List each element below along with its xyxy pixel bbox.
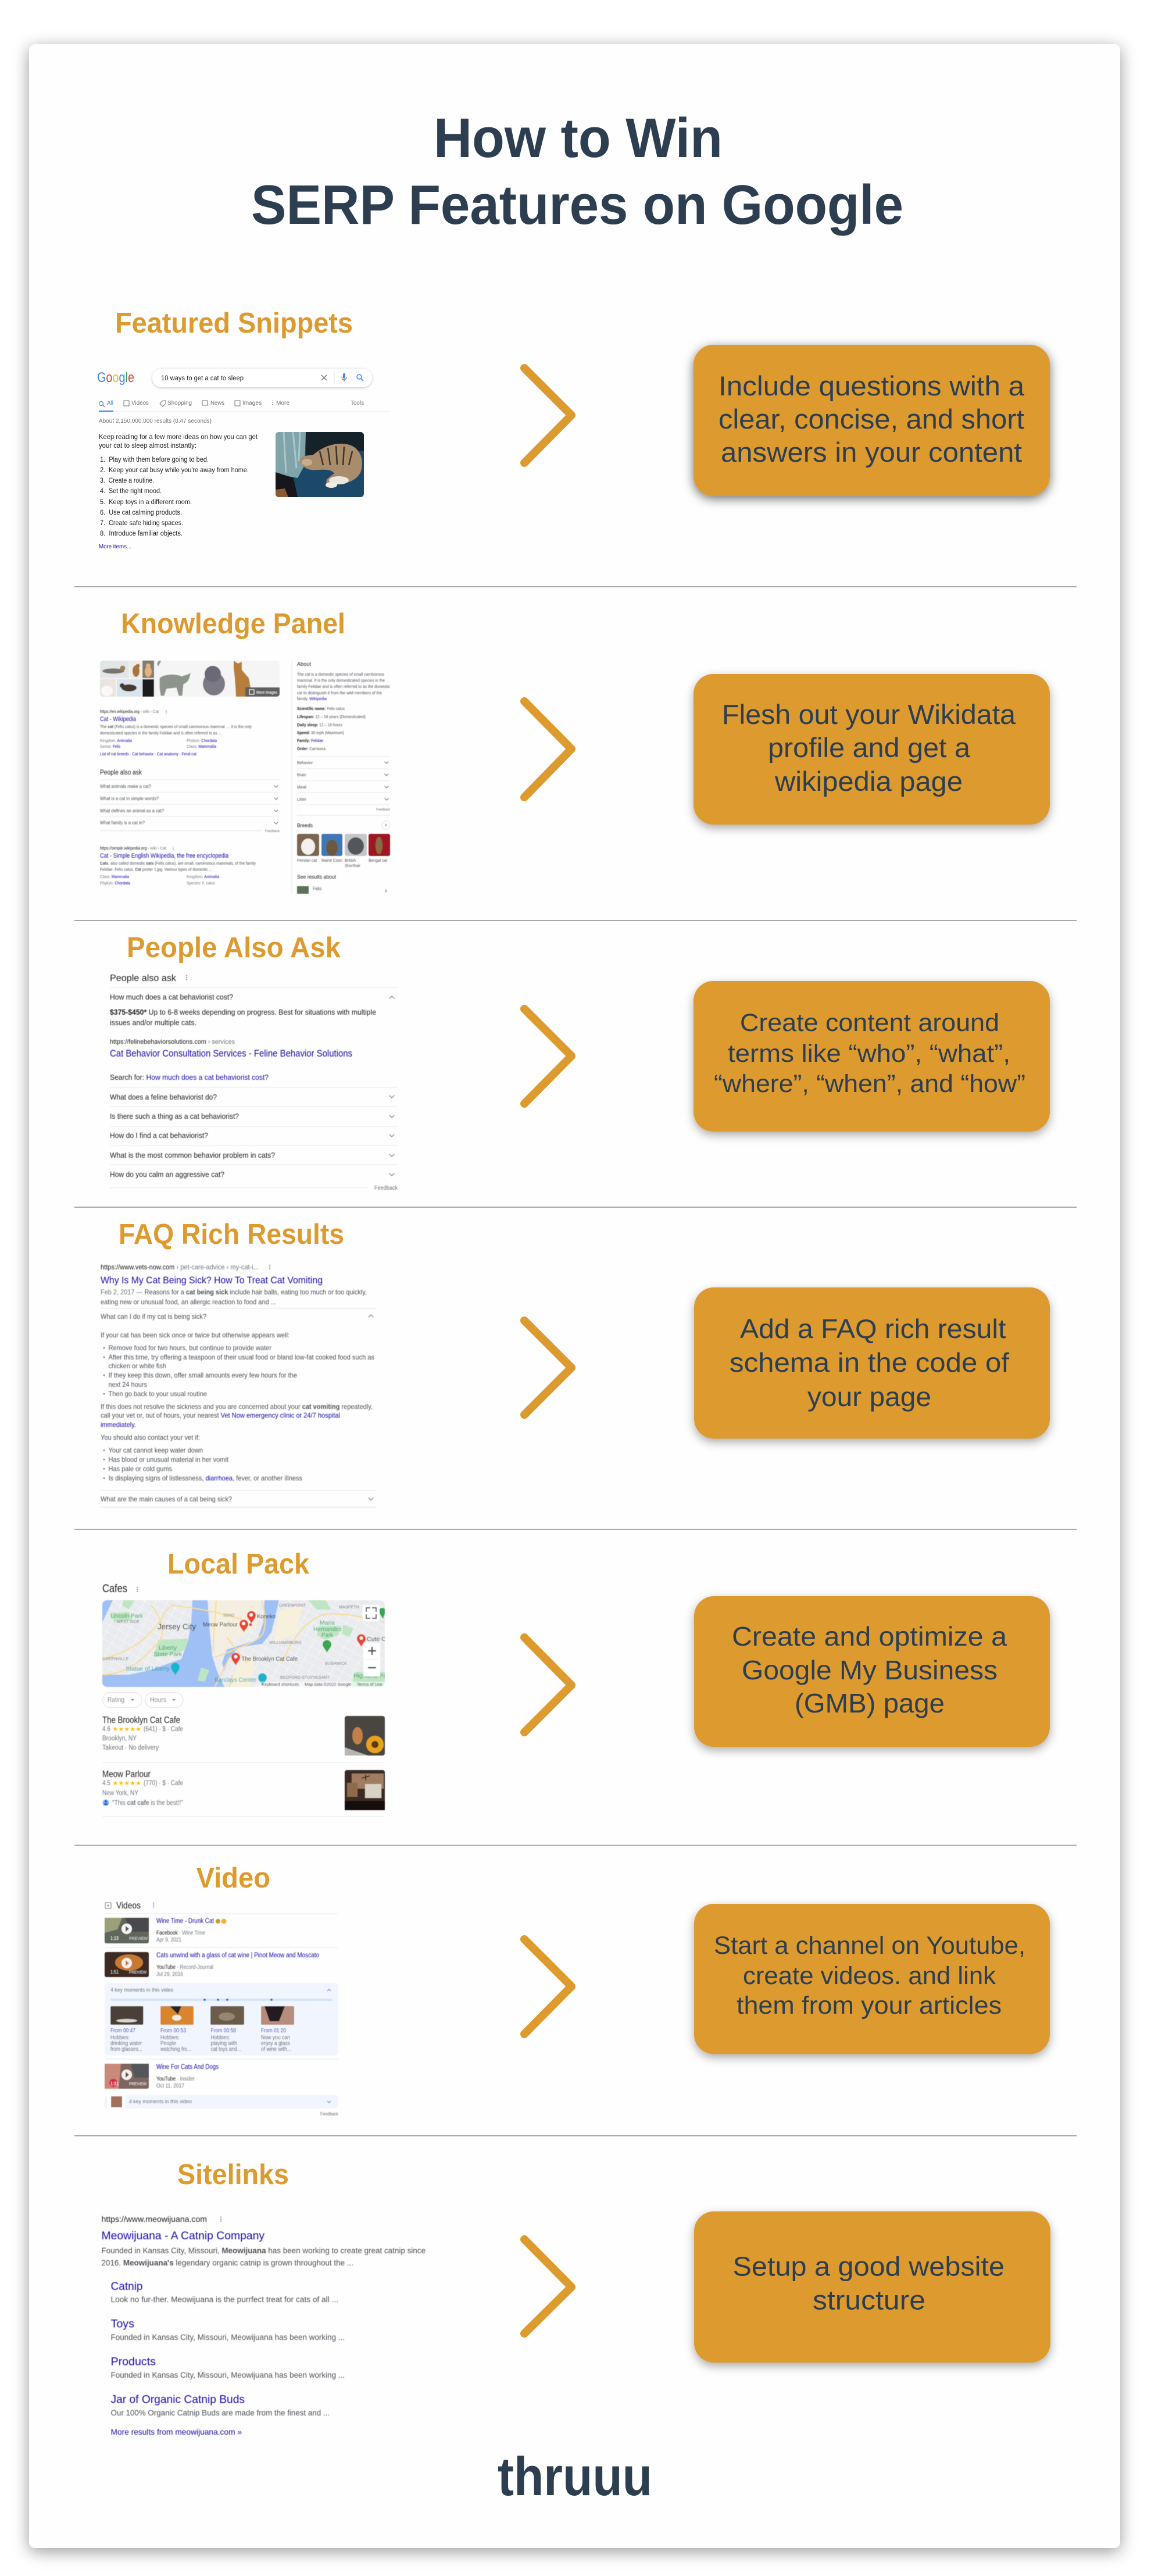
collapsed key moments: Feedback (320, 2111, 339, 2117)
google logo: Google (97, 370, 134, 386)
callout: video advice (694, 1904, 1050, 2054)
collapsed key moments: 4 key moments in this video (129, 2099, 192, 2105)
video result 3: Oct 11, 2017 (156, 2083, 184, 2089)
screenshot: people also ask box (110, 973, 398, 1191)
callout: sitelinks advice (694, 2211, 1050, 2363)
callout: people also ask advice (694, 981, 1050, 1132)
about panel: Litter (297, 797, 306, 802)
callout: faq advice: schema in the code of (730, 1347, 1009, 1378)
expanded faq answer: You should also contact your vet if: (101, 1433, 200, 1442)
key moments panel: From 01:20 (261, 2028, 286, 2034)
snippet list: 5. Keep toys in a different room. (100, 499, 192, 506)
listing: the brooklyn cat cafe: Brooklyn, NY (102, 1735, 137, 1742)
arrow: video (524, 1939, 571, 2034)
box heading: People also ask (110, 973, 177, 983)
map: BEDFORD-STUYVESANT (280, 1675, 330, 1680)
sitelink: jar of organic catnip buds: Jar of Organic Catnip Buds (110, 2393, 245, 2406)
screenshot: local pack results (102, 1583, 394, 1817)
expanded question: https://felinebehaviorsolutions.com › services (110, 1039, 235, 1046)
people also ask list: People also ask (100, 769, 142, 776)
people also ask list: What family is a cat in? (100, 820, 145, 826)
sitelink: toys: Toys (110, 2318, 134, 2331)
video result 1 (105, 1918, 338, 1947)
video result 1: PREVIEW (129, 1936, 148, 1941)
key moments panel: From 00:47 (110, 2028, 135, 2034)
key moments panel: cat toys and... (210, 2046, 241, 2053)
callout: featured snippets advice: Include questions with a (719, 370, 1025, 401)
snippet list: 3. Create a routine. (100, 477, 154, 484)
screenshot: video results (105, 1901, 339, 2117)
about panel (297, 661, 391, 815)
manhattan and downtown blocks (210, 1600, 262, 1657)
about panel: mammal. It is the only domesticated species in the (297, 678, 385, 683)
people also ask list: Feedback (265, 829, 280, 833)
title: SERP Features on Google (251, 174, 903, 236)
breeds row: Bengal cat (369, 858, 388, 863)
callout: faq advice (694, 1287, 1050, 1439)
people also ask list: What animals make a cat? (100, 784, 152, 789)
collapsed questions (110, 1087, 398, 1191)
section: faq rich results (101, 1219, 1050, 1507)
breeds row: See results about (297, 874, 336, 880)
listing: meow parlour: New York, NY (102, 1790, 138, 1797)
map footer (259, 1682, 385, 1687)
callout: knowledge panel advice (694, 674, 1050, 825)
heading: knowledge panel: Knowledge Panel (121, 608, 345, 640)
about panel: cat to distinguish it from the wild members of the (297, 690, 382, 695)
screenshot: knowledge panel results (100, 661, 391, 894)
sitelink: toys: Founded in Kansas City, Missouri, Meowijuana has been working ... (110, 2333, 345, 2342)
simple wikipedia result: Cat - Simple English Wikipedia, the free encyclopedia (100, 852, 229, 859)
result header: Why Is My Cat Being Sick? How To Treat Cat Vomiting (101, 1275, 323, 1286)
sitelink: products: Products (110, 2356, 156, 2368)
about panel: family Felidae and is often referred to as the domestic (297, 684, 390, 689)
map: Liberty (159, 1644, 177, 1651)
map: Meow Parlour (203, 1621, 238, 1628)
map: Koneko (257, 1613, 276, 1620)
key moments panel: enjoy a glass (261, 2040, 290, 2047)
expanded faq answer: immediately. (101, 1421, 136, 1429)
about panel: Feedback (376, 808, 391, 812)
expanded faq answer: Has blood or unusual material in her vomit (108, 1455, 229, 1464)
breeds row: Persian cat (297, 858, 317, 863)
main result: Founded in Kansas City, Missouri, Meowijuana has been working to create great catnip since (101, 2246, 426, 2255)
arrow: featured snippets (524, 368, 571, 463)
section: people also ask (110, 932, 1050, 1191)
snippet list: 6. Use cat calming products. (100, 509, 182, 516)
snippet list: Keep reading for a few more ideas on how you can get (99, 433, 258, 441)
heading: featured snippets: Featured Snippets (115, 308, 353, 339)
map: Highland Park (353, 1672, 392, 1679)
video result 2 (105, 1952, 319, 1978)
video result 3: Wine For Cats And Dogs (156, 2064, 219, 2071)
about panel: Behavior (297, 760, 313, 765)
key moments panel: People (160, 2040, 176, 2047)
callout: local pack advice: (GMB) page (795, 1688, 945, 1718)
sitelink: catnip: Catnip (110, 2281, 143, 2293)
map pins (247, 1611, 256, 1624)
video result 3 (105, 2064, 219, 2089)
collapsed faq question: What are the main causes of a cat being sick? (101, 1495, 232, 1503)
result count: About 2,150,000,000 results (0.47 seconds) (99, 418, 212, 424)
heading: sitelinks: Sitelinks (177, 2159, 289, 2190)
map: WEST SIDE (117, 1619, 140, 1624)
simple wikipedia result: Felidae. Felis catus. Cat poster 1.jpg. Various types of domestic ... (100, 866, 212, 872)
callout: faq advice: Add a FAQ rich result (740, 1314, 1006, 1344)
map: Statue of Liberty (126, 1665, 170, 1672)
expanded question: issues and/or multiple cats. (110, 1018, 196, 1027)
search tabs: Images (242, 399, 262, 406)
about panel: Daily sleep: 12 – 16 hours (297, 722, 342, 727)
collapsed questions: What is the most common behavior problem in cats? (110, 1151, 275, 1159)
videos heading: Videos (116, 1901, 141, 1911)
snippet list: your cat to sleep almost instantly: (99, 441, 196, 449)
search tabs: News (210, 399, 224, 406)
expanded faq answer: If this does not resolve the sickness and you are concerned about your cat vomiting repeatedly, (101, 1403, 373, 1411)
section: knowledge panel (100, 608, 1050, 894)
cafes heading: Cafes (102, 1583, 127, 1595)
key moments panel: from glasses... (110, 2046, 142, 2053)
about panel: About (297, 661, 311, 668)
video result 2: Cats unwind with a glass of cat wine | Pinot Meow and Moscato (156, 1952, 319, 1959)
callout: sitelinks advice: Setup a good website (732, 2252, 1005, 2282)
map: MASPETH (339, 1604, 359, 1610)
breeds row: Shorthair (345, 863, 360, 868)
sitelink: jar of organic catnip buds (110, 2393, 330, 2417)
expanded faq answer: Your cat cannot keep water down (108, 1446, 203, 1454)
main result: https://www.meowijuana.com (101, 2215, 207, 2224)
map (102, 1600, 394, 1687)
listing: meow parlour: 4.5 (102, 1780, 110, 1787)
simple wikipedia result: Species: F. catus (187, 880, 215, 886)
key moments panel: Hobbies: (110, 2035, 130, 2041)
simple wikipedia result: Phylum: Chordata (100, 880, 131, 886)
filter chips: Hours (150, 1697, 166, 1704)
map: The Brooklyn Cat Cafe (242, 1656, 298, 1662)
search tabs: Shopping (167, 399, 192, 406)
map: SOHO (223, 1612, 234, 1618)
wikipedia result (100, 709, 252, 757)
map: WILLIAMSBURG (269, 1640, 302, 1645)
about panel: Meat (297, 784, 307, 790)
main result: 2016. Meowijuana's legendary organic catnip is grown throughout the ... (101, 2259, 353, 2267)
search tabs: All (107, 399, 113, 406)
heading: people also ask: People Also Ask (127, 932, 341, 964)
result header: eating new or unusual food, an allergic reaction to food and ... (101, 1298, 276, 1306)
callout: video advice: them from your articles (737, 1992, 1002, 2020)
wikipedia result: Cat - Wikipedia (100, 716, 137, 723)
search tabs (99, 399, 389, 412)
key moments panel: watching fro... (160, 2046, 191, 2053)
search box: 10 ways to get a cat to sleep (161, 375, 244, 382)
callout: people also ask advice: “where”, “when”, and “how” (714, 1070, 1025, 1098)
title: How to Win (434, 107, 723, 169)
section: featured snippets (74, 308, 1077, 2507)
map: Keyboard shortcuts (262, 1682, 299, 1687)
section: sitelinks (101, 2159, 1050, 2436)
expanded faq answer: next 24 hours (108, 1380, 147, 1389)
map: Map data ©2022 Google (305, 1682, 351, 1687)
callout: local pack advice: Create and optimize a (732, 1621, 1007, 1651)
search tabs: Tools (351, 399, 364, 406)
callout: video advice: Start a channel on Youtube, (714, 1932, 1025, 1960)
heading: faq rich results: FAQ Rich Results (119, 1219, 344, 1250)
expanded question: $375-$450* Up to 6-8 weeks depending on progress. Best for situations with multiple (110, 1008, 376, 1016)
logo: thruuu: thruuu (498, 2446, 652, 2507)
snippet list: 4. Set the right mood. (100, 488, 162, 495)
listing: the brooklyn cat cafe: 4.6 (102, 1726, 110, 1733)
wikipedia result: Genus: Felis (100, 744, 120, 749)
arrow: sitelinks (524, 2239, 571, 2334)
snippet list: More items... (99, 544, 131, 550)
more results link: More results from meowijuana.com » (110, 2428, 242, 2436)
map labels: Lincoln Park (110, 1612, 144, 1619)
expanded faq answer: If they keep this down, offer small amounts every few hours for the (108, 1371, 297, 1379)
video result 3: 1:31 (110, 2081, 119, 2086)
screenshot: featured snippet result (97, 369, 389, 550)
search box (152, 369, 372, 387)
arrow: people also ask (524, 1009, 571, 1104)
about panel: Scientific name: Felis catus (297, 706, 345, 711)
simple wikipedia result: Kingdom: Animalia (187, 874, 220, 879)
section: video (105, 1863, 1050, 2117)
about panel: The cat is a domestic species of small carnivorous (297, 672, 384, 677)
about panel: Family: Felidae (297, 738, 323, 743)
video result 3: YouTube · Insider (156, 2076, 195, 2082)
sitelink: products: Founded in Kansas City, Missouri, Meowijuana has been working ... (110, 2371, 345, 2379)
expanded faq answer: If your cat has been sick once or twice but otherwise appears well: (101, 1331, 289, 1339)
people also ask list: What is a cat in simple words? (100, 796, 159, 801)
wikipedia result: Kingdom: Animalia (100, 738, 133, 743)
key moments panel: Hobbies: (160, 2035, 180, 2041)
map: Barclays Center (215, 1676, 256, 1683)
expanded question: Cat Behavior Consultation Services - Feline Behavior Solutions (110, 1048, 352, 1059)
main result: Meowijuana - A Catnip Company (101, 2230, 265, 2242)
map: BUSHWICK (325, 1661, 347, 1666)
expanded question: How much does a cat behaviorist cost? (110, 993, 233, 1001)
about panel: Lifespan: 12 – 18 years (Domesticated) (297, 714, 366, 719)
video result 1: 1:13 (110, 1936, 119, 1941)
map: GREENPOINT (279, 1603, 306, 1608)
key moments panel: drinking water (110, 2040, 142, 2047)
sitelink: catnip: Look no fur-ther. Meowijuana is the purrfect treat for cats of all ... (110, 2295, 338, 2304)
expanded question (110, 993, 394, 1082)
arrow: local pack (524, 1637, 571, 1732)
screenshot: sitelinks result (101, 2215, 426, 2436)
key moments panel: of wine with... (261, 2046, 291, 2053)
expanded question: Search for: How much does a cat behaviorist cost? (110, 1073, 269, 1082)
map controls (363, 1605, 380, 1621)
heading: video: Video (196, 1863, 270, 1894)
callout: knowledge panel advice: wikipedia page (774, 766, 963, 797)
listing: meow parlour: (770) · $ · Cafe (144, 1780, 183, 1787)
listing: the brooklyn cat cafe: ★★★★★ (113, 1726, 141, 1733)
about panel: Speed: 30 mph (Maximum) (297, 730, 344, 735)
key moments panel (105, 1983, 338, 2059)
snippet list: 1. Play with them before going to bed. (100, 456, 209, 463)
simple wikipedia result: Cats, also called domestic cats (Felis catus), are small, carnivorous mammals, of the family (100, 861, 256, 866)
wikipedia result: Class: Mammalia (187, 744, 217, 749)
heading: local pack: Local Pack (167, 1549, 310, 1580)
breeds row: Breeds (297, 822, 313, 829)
listing: meow parlour: Meow Parlour (102, 1769, 151, 1779)
map: Maria (320, 1619, 335, 1626)
simple wikipedia result: https://simple.wikipedia.org › wiki › Cat (100, 845, 167, 851)
sitelink: products (110, 2356, 345, 2379)
sitelink: jar of organic catnip buds: Our 100% Organic Catnip Buds are made from the finest and ... (110, 2409, 330, 2417)
expanded faq answer: Is displaying signs of listlessness, diarrhoea, fever, or another illness (108, 1474, 302, 1482)
video result 2: PREVIEW (129, 1970, 147, 1975)
callout: featured snippets advice: answers in your content (721, 437, 1022, 468)
collapsed questions: What does a feline behaviorist do? (110, 1093, 217, 1101)
breeds row: Maine Coon (321, 858, 342, 863)
video result 2: 1:51 (110, 1970, 119, 1975)
expanded faq answer: What can I do if my cat is being sick? (101, 1312, 206, 1321)
callout: video advice: create videos. and link (743, 1962, 996, 1990)
map: Park (321, 1632, 334, 1639)
snippet list: 2. Keep your cat busy while you're away from home. (100, 467, 249, 474)
result header (101, 1263, 376, 1308)
breeds row: British (345, 858, 356, 863)
arrow: knowledge panel (524, 701, 571, 797)
main result (101, 2215, 426, 2267)
filter chips (102, 1692, 183, 1707)
people also ask list (100, 769, 280, 833)
map: Terms of Use (357, 1682, 383, 1687)
result header: https://www.vets-now.com › pet-care-advice › my-cat-i... (101, 1263, 259, 1271)
listing: the brooklyn cat cafe (102, 1715, 385, 1762)
callout: people also ask advice: Create content around (740, 1009, 999, 1037)
collapsed questions: Is there such a thing as a cat behaviorist? (110, 1112, 239, 1121)
collapsed questions: How do I find a cat behaviorist? (110, 1131, 208, 1140)
roads (102, 1600, 385, 1687)
callout: local pack advice: Google My Business (742, 1655, 998, 1685)
filter chips: Rating (108, 1697, 124, 1704)
expanded faq answer: call your vet or, out of hours, your nearest Vet Now emergency clinic or 24/7 hospital (101, 1411, 340, 1419)
callout: local pack advice (694, 1596, 1050, 1747)
photo: sleeping cat (276, 432, 364, 497)
video result 1: Wine Time - Drunk Cat (156, 1918, 215, 1925)
image strip (100, 661, 280, 697)
arrow: faq rich results (524, 1321, 571, 1415)
map: Cute Cafe (367, 1636, 394, 1643)
map: State Park (153, 1651, 183, 1658)
callout: sitelinks advice: structure (813, 2285, 925, 2315)
listing: meow parlour (102, 1769, 385, 1817)
expanded faq answer: chicken or white fish (108, 1362, 166, 1370)
collapsed faq question (101, 1490, 376, 1507)
section: local pack (102, 1549, 1050, 1817)
result header: Feb 2, 2017 — Reasons for a cat being sick include hair balls, eating too much or too quickly, (101, 1288, 367, 1296)
video result 1: Apr 9, 2021 (156, 1937, 181, 1943)
video result 3: PREVIEW (129, 2081, 147, 2086)
key moments panel: Now you can (261, 2035, 290, 2041)
listing: the brooklyn cat cafe: Takeout · No delivery (102, 1744, 159, 1751)
snippet list: 7. Create safe hiding spaces. (100, 520, 183, 527)
search tabs: Videos (131, 399, 149, 406)
simple wikipedia result: Class: Mammalia (100, 874, 130, 879)
about panel: family. Wikipedia (297, 696, 327, 701)
wikipedia result: List of cat breeds · Cat behavior · Cat anatomy · Feral cat (100, 751, 197, 757)
screenshot: faq rich result (101, 1263, 376, 1507)
expanded faq answer: Then go back to your usual routine (108, 1390, 207, 1398)
expanded faq answer: After this time, try offering a teaspoon of their usual food or bland low-fat cooked food such as (108, 1353, 374, 1361)
parks (110, 1600, 385, 1687)
collapsed questions: Feedback (374, 1185, 398, 1191)
callout: faq advice: your page (807, 1382, 931, 1412)
key moments panel: From 00:53 (160, 2028, 186, 2034)
map: GREENVILLE (102, 1656, 128, 1661)
wikipedia result: https://en.wikipedia.org › wiki › Cat (100, 709, 159, 714)
key moments panel: 4 key moments in this video (110, 1987, 173, 1993)
key moments panel: From 00:58 (210, 2028, 236, 2034)
wikipedia result: domesticated species in the family Felidae and is often referred to as ... (100, 730, 221, 736)
listing: meow parlour: "This cat cafe is the best!!" (112, 1800, 183, 1807)
breeds row: Felis (313, 886, 321, 891)
about panel: Brain (297, 772, 306, 777)
expanded faq answer: Remove food for two hours, but continue to provide water (108, 1344, 271, 1352)
wikipedia result: Phylum: Chordata (187, 738, 217, 743)
callout: featured snippets advice (694, 345, 1050, 496)
callout: knowledge panel advice: Flesh out your Wikidata (722, 699, 1016, 730)
collapsed key moments (105, 2095, 339, 2117)
callout: featured snippets advice: clear, concise, and short (719, 404, 1024, 434)
sitelink: toys (110, 2318, 345, 2342)
key moments panel: playing with (210, 2040, 237, 2047)
simple wikipedia result (100, 845, 256, 886)
callout: knowledge panel advice: profile and get a (768, 732, 971, 763)
callout: people also ask advice: terms like “who”, “what”, (728, 1040, 1010, 1068)
video result 2: Jul 29, 2016 (156, 1971, 183, 1978)
expanded faq answer: Has pale or cold gums (108, 1465, 172, 1473)
key moments panel: Hobbies: (210, 2035, 230, 2041)
snippet list: 8. Introduce familiar objects. (100, 530, 183, 537)
breeds row (297, 821, 390, 894)
videos heading (105, 1901, 338, 1914)
title (251, 107, 903, 236)
about panel: Order: Carnivora (297, 746, 326, 751)
image strip: More images (256, 690, 277, 695)
snippet list (99, 433, 258, 550)
search tabs: More (276, 399, 289, 406)
listing: meow parlour: ★★★★★ (113, 1780, 141, 1787)
video result 2: YouTube · Record-Journal (156, 1964, 213, 1971)
map: Jersey City (158, 1622, 196, 1631)
wikipedia result: The cat (Felis catus) is a domestic species of small carnivorous mammal. ... It is the only (100, 724, 252, 729)
listing: the brooklyn cat cafe: (641) · $ · Cafe (144, 1726, 183, 1733)
listing: the brooklyn cat cafe: The Brooklyn Cat Cafe (102, 1715, 180, 1725)
water (144, 1600, 224, 1687)
map: Hernandez (313, 1626, 342, 1633)
people also ask list: What defines an animal as a cat? (100, 808, 165, 814)
sitelink: catnip (110, 2281, 338, 2304)
video result 1: Facebook · Wine Time (156, 1930, 205, 1936)
expanded faq answer (101, 1312, 374, 1482)
collapsed questions: How do you calm an aggressive cat? (110, 1170, 224, 1179)
